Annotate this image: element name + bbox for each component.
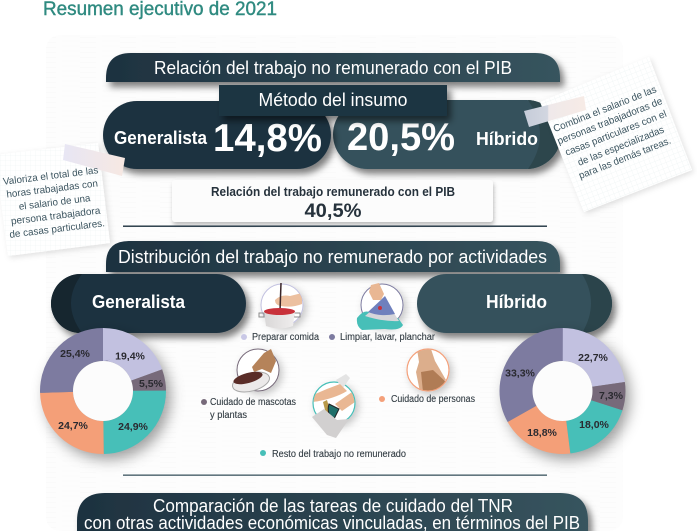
- legend: cuidado de mascotas y plantas: Cuidado de mascotas: [210, 397, 296, 408]
- icon: cuidado de personas: [407, 349, 449, 392]
- note: método generalista: horas trabajadas con: [6, 178, 99, 201]
- pill: híbrido 20,5%: Híbrido: [476, 129, 538, 149]
- tape: [63, 144, 125, 176]
- pill: híbrido 20,5%: [333, 100, 561, 169]
- icon: resto del trabajo no remunerado: [312, 374, 355, 438]
- donut chart: híbrido: 7,3%: [599, 390, 624, 402]
- heading: comparación de las tareas de cuidado: Comparación de las tareas de cuidado del TNR: [153, 496, 513, 516]
- donut chart: generalista: 5,5%: [139, 378, 164, 390]
- pill: generalista 14,8%: Generalista: [114, 128, 208, 148]
- donut chart: híbrido: [500, 328, 625, 454]
- note: método generalista: Valoriza el total de las: [2, 165, 99, 188]
- donut chart: generalista: [40, 328, 166, 454]
- heading: distribución por actividades: Distribución del trabajo no remunerado por actividades: [118, 247, 547, 267]
- heading: relación del trabajo no remunerado: Relación del trabajo no remunerado con el PIB: [154, 58, 512, 78]
- note: método híbrido: [524, 57, 692, 212]
- subheading: método del insumo: Método del insumo: [258, 90, 408, 110]
- pill: generalista: Generalista: [92, 292, 186, 312]
- subheading: método del insumo: [219, 85, 447, 116]
- note: método híbrido: personas trabajadoras de: [556, 96, 665, 147]
- icon: preparar comida: [259, 283, 303, 328]
- note: método generalista: de casas particulares.: [9, 218, 106, 241]
- pill: híbrido: [417, 274, 612, 333]
- donut chart: generalista: 24,9%: [118, 421, 149, 433]
- note: método generalista: el salario de una: [18, 193, 92, 213]
- note: método híbrido: Combina el salario de las: [552, 84, 658, 135]
- note: método generalista: persona trabajadora: [10, 206, 101, 227]
- tape: [524, 96, 586, 127]
- donut chart: generalista: 25,4%: [60, 348, 91, 360]
- pill: generalista 14,8%: 14,8%: [213, 117, 322, 160]
- callout: relación del trabajo remunerado: 40,5%: [304, 201, 362, 222]
- note: método híbrido: de las especializadas: [576, 125, 666, 169]
- legend: resto del trabajo no remunerado: Resto del trabajo no remunerado: [272, 449, 406, 460]
- donut chart: híbrido: 22,7%: [578, 352, 609, 364]
- callout: relación del trabajo remunerado: [172, 180, 493, 222]
- paper background: [46, 35, 623, 531]
- legend: cuidado de mascotas y plantas: y plantas: [210, 410, 247, 421]
- pill: generalista 14,8%: [103, 101, 331, 169]
- heading: comparación de las tareas de cuidado: [77, 493, 588, 531]
- note: método híbrido: casas particulares con el: [564, 109, 668, 159]
- legend: cuidado de mascotas y plantas: [201, 397, 296, 421]
- heading: relación del trabajo no remunerado: [106, 53, 560, 82]
- donut chart: híbrido: 33,3%: [505, 368, 536, 380]
- pill: generalista: [51, 274, 246, 333]
- donut chart: híbrido: 18,0%: [579, 419, 610, 431]
- legend: cuidado de personas: Cuidado de personas: [391, 394, 475, 405]
- note: método generalista: [0, 143, 125, 256]
- heading: distribución por actividades: [106, 241, 560, 272]
- icon: cuidado de mascotas y plantas: [230, 349, 279, 396]
- legend: preparar comida: Preparar comida: [252, 332, 319, 343]
- pill: híbrido: Híbrido: [486, 292, 547, 312]
- callout: relación del trabajo remunerado: Relación del trabajo remunerado con el PIB: [211, 185, 455, 199]
- donut chart: generalista: 24,7%: [58, 420, 89, 432]
- icon: limpiar, lavar, planchar: [357, 283, 403, 330]
- donut chart: generalista: 19,4%: [115, 350, 146, 362]
- pill: híbrido 20,5%: 20,5%: [347, 116, 455, 159]
- legend: limpiar, lavar, planchar: Limpiar, lavar, planchar: [340, 332, 436, 343]
- note: método híbrido: para las demás tareas.: [577, 136, 673, 182]
- donut chart: híbrido: 18,8%: [527, 427, 558, 439]
